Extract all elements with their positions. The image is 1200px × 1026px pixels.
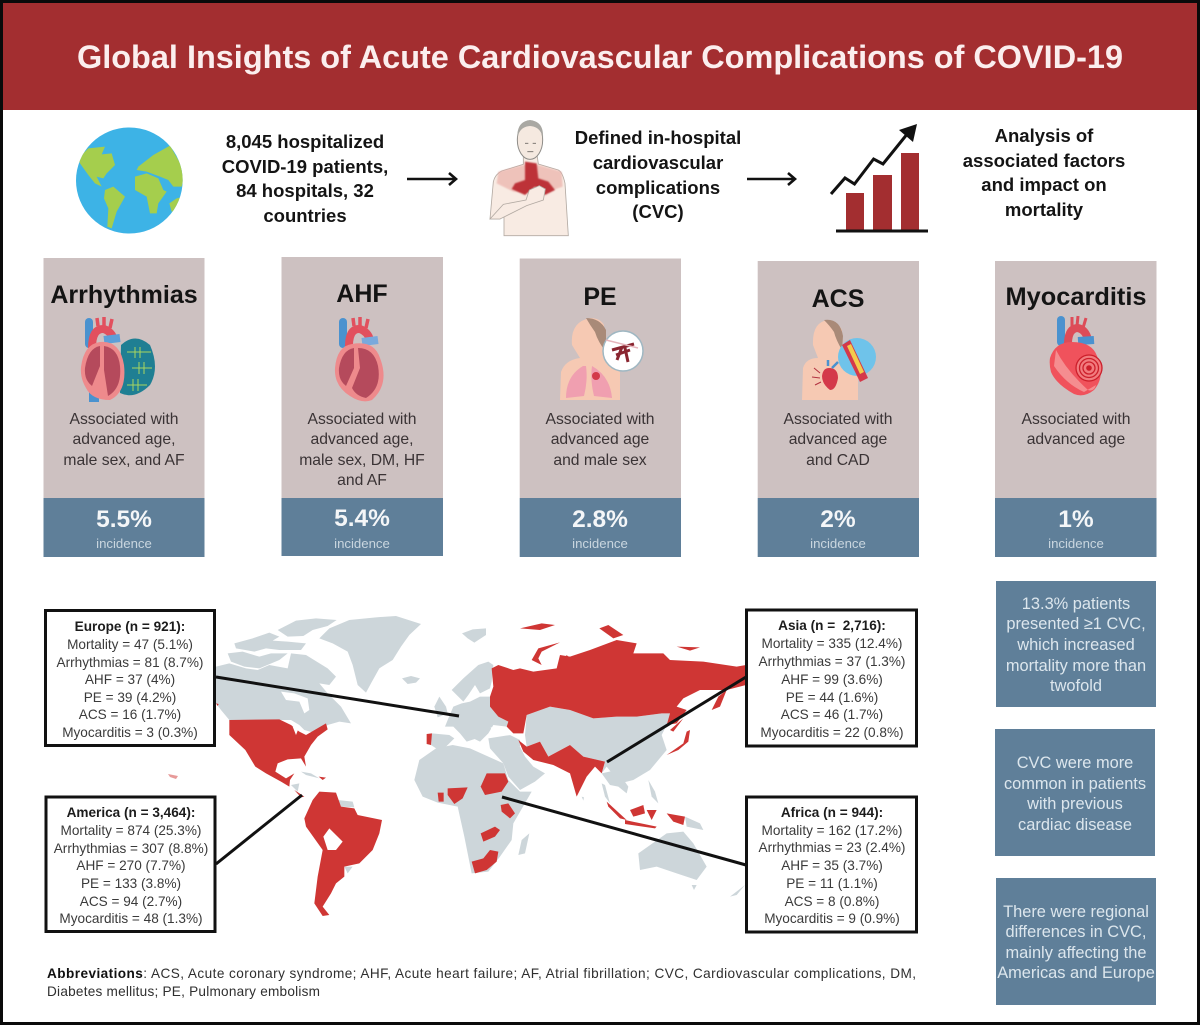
text: ACS associations: advanced age — [789, 431, 888, 448]
arrow: complications to analysis — [747, 173, 795, 185]
text block: regional differences finding: differences in CVC, — [1006, 923, 1146, 941]
heading: arrhythmias: Arrhythmias — [50, 281, 198, 309]
callout: America: Arrhythmias = 307 (8.8%) — [54, 841, 208, 856]
icon: patient with chest pain — [490, 120, 568, 236]
text: ACS associations: Associated with — [784, 411, 892, 428]
text block: regional differences finding: mainly affecting the — [1006, 944, 1146, 962]
text: defined complications: Defined in-hospital — [575, 127, 741, 148]
text: analysis: Analysis of — [995, 125, 1094, 146]
text block: regional differences finding — [996, 878, 1156, 1005]
callout: Africa: Mortality = 162 (17.2%) — [762, 823, 902, 838]
stat: PE incidence: 2.8% — [572, 506, 628, 533]
text block: abbreviations — [47, 966, 916, 999]
icon: globe — [76, 127, 185, 233]
text block: mortality finding: presented ≥1 CVC, — [1006, 615, 1146, 633]
text block: mortality finding: 13.3% patients — [1022, 595, 1130, 613]
panel: ACS — [758, 261, 919, 557]
icon: heart — [335, 317, 384, 401]
arrow: population to complications — [407, 173, 456, 185]
text: PE associations — [546, 411, 654, 469]
text block: mortality finding — [996, 581, 1156, 707]
callout: America: Myocarditis = 48 (1.3%) — [59, 911, 203, 926]
stat: AHF incidence — [334, 505, 390, 551]
text: arrhythmias associations: Associated with — [70, 411, 178, 428]
connector: Africa — [502, 797, 746, 865]
callout: Africa: Arrhythmias = 23 (2.4%) — [759, 840, 905, 855]
text: arrhythmias associations: male sex, and AF — [63, 452, 185, 469]
callout: Asia: Mortality = 335 (12.4%) — [762, 636, 902, 651]
icon: rising bar chart — [831, 124, 928, 231]
panel: arrhythmias — [44, 258, 204, 557]
icon: lungs with embolism — [560, 318, 643, 400]
callout: Africa: AHF = 35 (3.7%) — [781, 858, 883, 873]
text: PE associations: advanced age — [551, 431, 650, 448]
text: AHF associations: male sex, DM, HF — [299, 452, 425, 469]
text block: cardiac disease finding: CVC were more — [1017, 754, 1133, 772]
text: defined complications: complications — [596, 177, 720, 198]
text block: mortality finding: twofold — [1050, 677, 1102, 695]
callout: Asia: ACS = 46 (1.7%) — [781, 707, 883, 722]
callout: Asia — [746, 610, 916, 746]
text: study population: 84 hospitals, 32 — [236, 180, 374, 201]
heading: myocarditis: Myocarditis — [1006, 283, 1146, 311]
text: analysis — [963, 125, 1125, 220]
text: study population: COVID-19 patients, — [222, 156, 388, 177]
callout: Europe: PE = 39 (4.2%) — [84, 690, 176, 705]
text: AHF associations: Associated with — [308, 411, 416, 428]
heading: PE: PE — [583, 283, 617, 311]
panel: myocarditis — [995, 261, 1156, 557]
stat: myocarditis incidence: 1% — [1058, 506, 1094, 533]
text block: abbreviations: Abbreviations: ACS, Acute coronary syndrome; AHF, Acute heart failure; AF, Atrial fibrillation; CVC, Cardiovascular complications, DM, — [47, 966, 916, 981]
callout: Europe: ACS = 16 (1.7%) — [79, 707, 181, 722]
connector: Asia — [607, 677, 746, 762]
title banner: Global Insights of Acute Cardiovascular Complications of COVID-19 — [77, 39, 1123, 75]
stat: PE incidence — [572, 506, 628, 551]
callout: America: AHF = 270 (7.7%) — [76, 858, 186, 873]
text: analysis: associated factors — [963, 150, 1125, 171]
callout: Africa: Africa (n = 944): — [781, 805, 883, 820]
title banner — [3, 3, 1198, 110]
callout: Europe: AHF = 37 (4%) — [85, 672, 175, 687]
panel: AHF — [282, 257, 443, 556]
callout: Africa: PE = 11 (1.1%) — [786, 876, 878, 891]
text: AHF associations: and AF — [337, 472, 387, 489]
text: defined complications: (CVC) — [632, 201, 684, 222]
callout: America: PE = 133 (3.8%) — [81, 876, 181, 891]
callout: Asia: AHF = 99 (3.6%) — [781, 672, 883, 687]
text: study population: countries — [263, 205, 347, 226]
panel: PE — [520, 258, 681, 557]
text: study population — [222, 131, 388, 226]
icon: inflamed heart — [1050, 316, 1102, 395]
text block: cardiac disease finding: cardiac disease — [1018, 816, 1132, 834]
text: myocarditis associations: Associated with — [1022, 411, 1130, 428]
text block: mortality finding: mortality more than — [1006, 657, 1146, 675]
text: PE associations: Associated with — [546, 411, 654, 428]
text: PE associations: and male sex — [553, 452, 647, 469]
connector: Europe — [216, 677, 459, 716]
callout: Asia: Asia (n = 2,716): — [778, 618, 886, 633]
callout: Europe: Arrhythmias = 81 (8.7%) — [57, 655, 203, 670]
icon: coronary artery occlusion — [802, 320, 876, 400]
text: arrhythmias associations — [63, 411, 185, 469]
callout: America — [46, 797, 215, 932]
callout: America: Mortality = 874 (25.3%) — [61, 823, 201, 838]
text: myocarditis associations — [1022, 411, 1130, 448]
text: analysis: mortality — [1005, 199, 1084, 220]
text block: cardiac disease finding — [995, 729, 1155, 856]
text block: abbreviations: Diabetes mellitus; PE, Pulmonary embolism — [47, 984, 320, 999]
text: AHF associations: advanced age, — [311, 431, 413, 448]
text: arrhythmias associations: advanced age, — [73, 431, 175, 448]
stat: myocarditis incidence — [1048, 506, 1104, 551]
callout: Africa: Myocarditis = 9 (0.9%) — [764, 911, 900, 926]
text block: cardiac disease finding: common in patients — [1004, 775, 1146, 793]
callout: Europe: Europe (n = 921): — [75, 619, 185, 634]
text block: regional differences finding: There were regional — [1003, 903, 1149, 921]
stat: ACS incidence: incidence — [810, 536, 866, 551]
icon: heart with atrial ECG — [81, 317, 155, 402]
text block: regional differences finding: Americas and Europe — [997, 964, 1155, 982]
text: myocarditis associations: advanced age — [1027, 431, 1126, 448]
text: ACS associations: and CAD — [806, 452, 870, 469]
callout: Asia: Myocarditis = 22 (0.8%) — [760, 725, 904, 740]
stat: arrhythmias incidence: incidence — [96, 536, 152, 551]
stat: PE incidence: incidence — [572, 536, 628, 551]
stat: ACS incidence: 2% — [820, 506, 856, 533]
stat: AHF incidence: incidence — [334, 536, 390, 551]
stat: AHF incidence: 5.4% — [334, 505, 390, 532]
text block: cardiac disease finding: with previous — [1026, 795, 1123, 813]
text: defined complications: cardiovascular — [593, 152, 723, 173]
text: AHF associations — [299, 411, 425, 489]
callout: Africa: ACS = 8 (0.8%) — [785, 894, 879, 909]
stat: ACS incidence — [810, 506, 866, 551]
chart: world map of participating countries — [168, 616, 746, 916]
callout: Europe: Myocarditis = 3 (0.3%) — [62, 725, 198, 740]
stat: myocarditis incidence: incidence — [1048, 536, 1104, 551]
connector: America — [216, 795, 302, 864]
text: ACS associations — [784, 411, 892, 469]
callout: Europe — [46, 610, 214, 746]
stat: arrhythmias incidence — [96, 506, 152, 551]
callout: America: ACS = 94 (2.7%) — [80, 894, 182, 909]
text: analysis: and impact on — [981, 174, 1107, 195]
callout: Asia: PE = 44 (1.6%) — [786, 690, 878, 705]
heading: AHF: AHF — [336, 280, 388, 308]
heading: ACS: ACS — [812, 285, 864, 313]
callout: America: America (n = 3,464): — [67, 805, 195, 820]
text block: mortality finding: which increased — [1016, 636, 1135, 654]
callout: Asia: Arrhythmias = 37 (1.3%) — [759, 654, 905, 669]
callout: Africa — [746, 797, 916, 932]
text: defined complications — [575, 127, 741, 222]
stat: arrhythmias incidence: 5.5% — [96, 506, 152, 533]
callout: Europe: Mortality = 47 (5.1%) — [67, 637, 193, 652]
text: study population: 8,045 hospitalized — [226, 131, 384, 152]
